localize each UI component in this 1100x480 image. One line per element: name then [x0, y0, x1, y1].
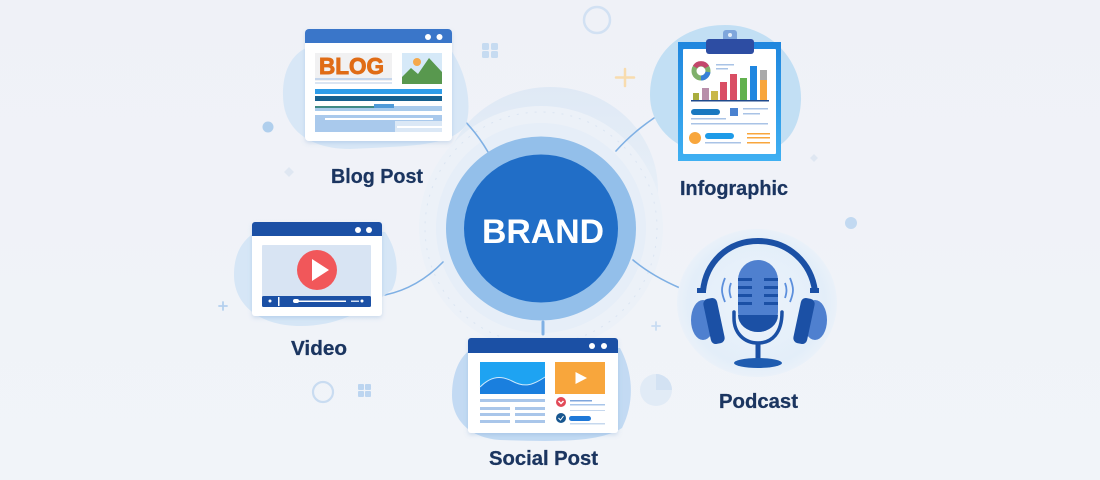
ear cups — [691, 300, 715, 340]
central halo background — [419, 87, 663, 350]
label: infographic: Infographic — [680, 178, 788, 200]
headband — [703, 241, 815, 291]
decorative icons and dots — [219, 7, 857, 406]
card: podcast — [677, 229, 837, 377]
brand hub — [446, 136, 636, 320]
card: blog post — [283, 29, 468, 149]
sound waves — [722, 278, 793, 302]
microphone — [738, 260, 778, 332]
label: podcast: Podcast — [719, 391, 798, 413]
label: video: Video — [291, 338, 347, 360]
brand label: BRAND — [482, 213, 604, 251]
card: video — [234, 222, 397, 326]
card: infographic — [650, 25, 801, 161]
connector lines — [385, 112, 680, 334]
blog wordmark: BLOG — [319, 53, 384, 79]
label: social post: Social Post — [489, 448, 598, 470]
card: social post — [452, 338, 631, 441]
label: blog post: Blog Post — [331, 166, 423, 188]
